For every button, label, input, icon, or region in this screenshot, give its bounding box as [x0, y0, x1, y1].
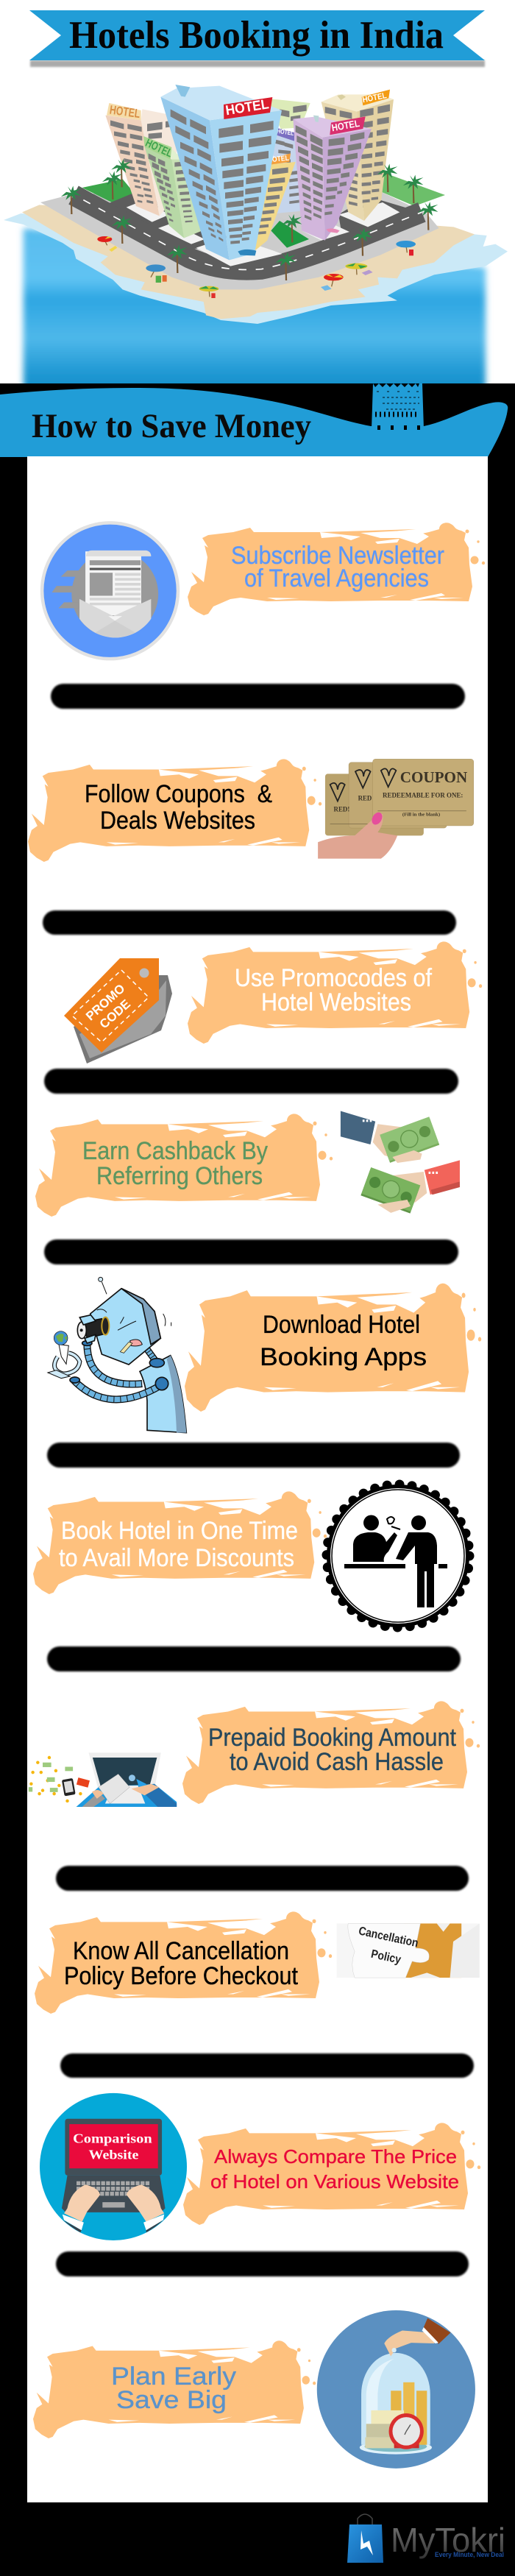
- tip 6: text: [59, 1517, 298, 1572]
- tip 9: text: of Hotel on Various Website: [210, 2170, 459, 2193]
- tip 2: coupon cards in hand: (Fill in the blank): [402, 813, 440, 818]
- tip 2: coupon cards in hand: REDEEMABLE FOR ONE:: [383, 792, 463, 799]
- tip 3: promo code tag: CODE: [97, 997, 133, 1031]
- tip 7: brush: [182, 1701, 480, 1804]
- banner heading: How to Save Money: [32, 407, 311, 445]
- tip 1: newsletter icon: [40, 521, 180, 660]
- tip 2: coupon cards in hand: RED!: [334, 805, 349, 813]
- tip 4: hands exchanging money: [341, 1111, 460, 1214]
- tip 2: text: Follow Coupons &: [85, 780, 272, 808]
- tagline: Every Minute, New Deal: [435, 2551, 504, 2559]
- land and sidewalk: [40, 191, 439, 289]
- hero illustration: hotels on a beach: [4, 85, 508, 397]
- tip 5: text: [260, 1311, 427, 1371]
- tip 4: brush: [35, 1114, 333, 1217]
- tip 2: brush: [28, 759, 322, 862]
- tip 10: text: Plan Early: [111, 2363, 236, 2391]
- tip 5: text: Booking Apps: [260, 1343, 427, 1371]
- tip 9: text: [210, 2145, 459, 2193]
- tip 1: text: Subscribe Newsletter: [231, 542, 444, 570]
- tip 9: text: Always Compare The Price: [214, 2145, 457, 2168]
- tip 1: text: of Travel Agencies: [244, 565, 429, 592]
- tip 3: text: Hotel Websites: [261, 988, 411, 1016]
- icon: tower: [372, 383, 424, 429]
- tip 6: text: Book Hotel in One Time: [61, 1517, 298, 1545]
- back blue hotel: [272, 127, 302, 213]
- tip 7: text: Prepaid Booking Amount: [208, 1724, 456, 1752]
- title ribbon: [29, 10, 485, 67]
- white content panel: [27, 456, 488, 2502]
- tip 7: text: [208, 1724, 456, 1776]
- tip 8: text: [64, 1937, 298, 1990]
- tip 3: promo code tag: [64, 958, 172, 1064]
- divider bar 3: [44, 1069, 458, 1094]
- footer logo: MyTokri: [347, 2514, 505, 2563]
- sand: [22, 205, 475, 319]
- pink hotel: [105, 102, 177, 216]
- tip 2: coupon cards in hand: COUPON: [400, 768, 468, 786]
- tip 9: comparison website laptop: [40, 2093, 187, 2240]
- blue main hotel: HOTEL: [224, 96, 270, 118]
- tip 3: text: Use Promocodes of: [235, 964, 432, 992]
- beige hotel: [322, 90, 394, 221]
- tip 10: text: Save Big: [116, 2386, 227, 2414]
- tip 3: promo code tag: PROMO: [83, 981, 128, 1023]
- beige hotel: HOTEL: [362, 91, 388, 105]
- blue wave banner: [0, 383, 508, 457]
- tip 9: brush: [183, 2123, 480, 2225]
- tip 3: brush: [188, 941, 482, 1044]
- palm trees: [60, 159, 438, 280]
- tip 2: coupon cards in hand: [318, 759, 474, 859]
- tip 4: text: [82, 1137, 268, 1190]
- purple hotel: HOTEL: [331, 118, 360, 133]
- tip 8: cancellation policy puzzle: Cancellation: [358, 1924, 419, 1950]
- tip 2: text: [85, 780, 272, 835]
- tip 3: text: [235, 964, 432, 1016]
- divider bar 2: [43, 910, 456, 935]
- tip 6: brush: [33, 1491, 327, 1594]
- divider bar 7: [56, 1866, 469, 1891]
- back blue hotel: HOTEL: [277, 127, 295, 137]
- divider bar 8: [60, 2053, 474, 2078]
- brand name: MyTokri: [391, 2521, 505, 2559]
- plazas: [127, 200, 399, 266]
- tip 1: text: [231, 542, 444, 592]
- divider bar 4: [44, 1239, 458, 1264]
- foam: [4, 213, 508, 324]
- tip 6: text: to Avail More Discounts: [59, 1544, 294, 1572]
- tip 4: text: Referring Others: [96, 1162, 263, 1190]
- purple hotel: [293, 116, 372, 241]
- tip 7: online payment illustration: [29, 1752, 177, 1807]
- main road: [74, 195, 422, 269]
- green hotel: [143, 136, 202, 238]
- divider bar 6: [47, 1646, 461, 1671]
- tip 4: text: Earn Cashback By: [82, 1137, 268, 1165]
- pink hotel: HOTEL: [109, 102, 141, 121]
- beach umbrellas: [97, 236, 416, 298]
- centre garden: [258, 216, 309, 250]
- tip 5: brush: [185, 1284, 481, 1412]
- grass: [82, 171, 445, 206]
- divider bar 9: [56, 2251, 469, 2276]
- yellow hotel: [243, 153, 296, 252]
- tip 5: robot looking through telescope: [48, 1277, 186, 1433]
- tip 6: concierge badge: [327, 1485, 469, 1627]
- tip 8: cancellation policy puzzle: Policy: [370, 1947, 402, 1967]
- tip 8: brush: [35, 1911, 332, 2014]
- icon: shopping bag: [347, 2514, 383, 2563]
- sea: [24, 228, 486, 397]
- title text: Hotels Booking in India: [69, 14, 444, 57]
- green hotel: HOTEL: [143, 137, 174, 160]
- tip 8: text: Policy Before Checkout: [64, 1962, 298, 1990]
- tip 8: cancellation policy puzzle: [337, 1923, 480, 1978]
- tip 9: comparison website laptop: Comparison: [73, 2131, 152, 2145]
- tip 9: comparison website laptop: Website: [89, 2148, 139, 2162]
- tip 2: coupon cards in hand: RED: [358, 795, 372, 802]
- tip 8: text: Know All Cancellation: [73, 1937, 289, 1965]
- divider bar 1: [51, 684, 465, 709]
- tip 5: text: Download Hotel: [263, 1311, 420, 1339]
- tip 1: brush: [188, 523, 485, 615]
- yellow hotel: HOTEL: [267, 155, 289, 165]
- tip 10: brush: [33, 2340, 316, 2438]
- divider bar 5: [47, 1443, 460, 1468]
- back green hotel: [265, 98, 310, 129]
- inner road areas: [108, 191, 417, 250]
- blue main hotel: [160, 85, 282, 260]
- white hero background: [0, 0, 515, 386]
- tip 10: savings under glass dome: [317, 2310, 475, 2469]
- tip 7: text: to Avoid Cash Hassle: [230, 1748, 444, 1776]
- tip 10: text: [111, 2363, 236, 2414]
- tip 2: text: Deals Websites: [100, 807, 255, 835]
